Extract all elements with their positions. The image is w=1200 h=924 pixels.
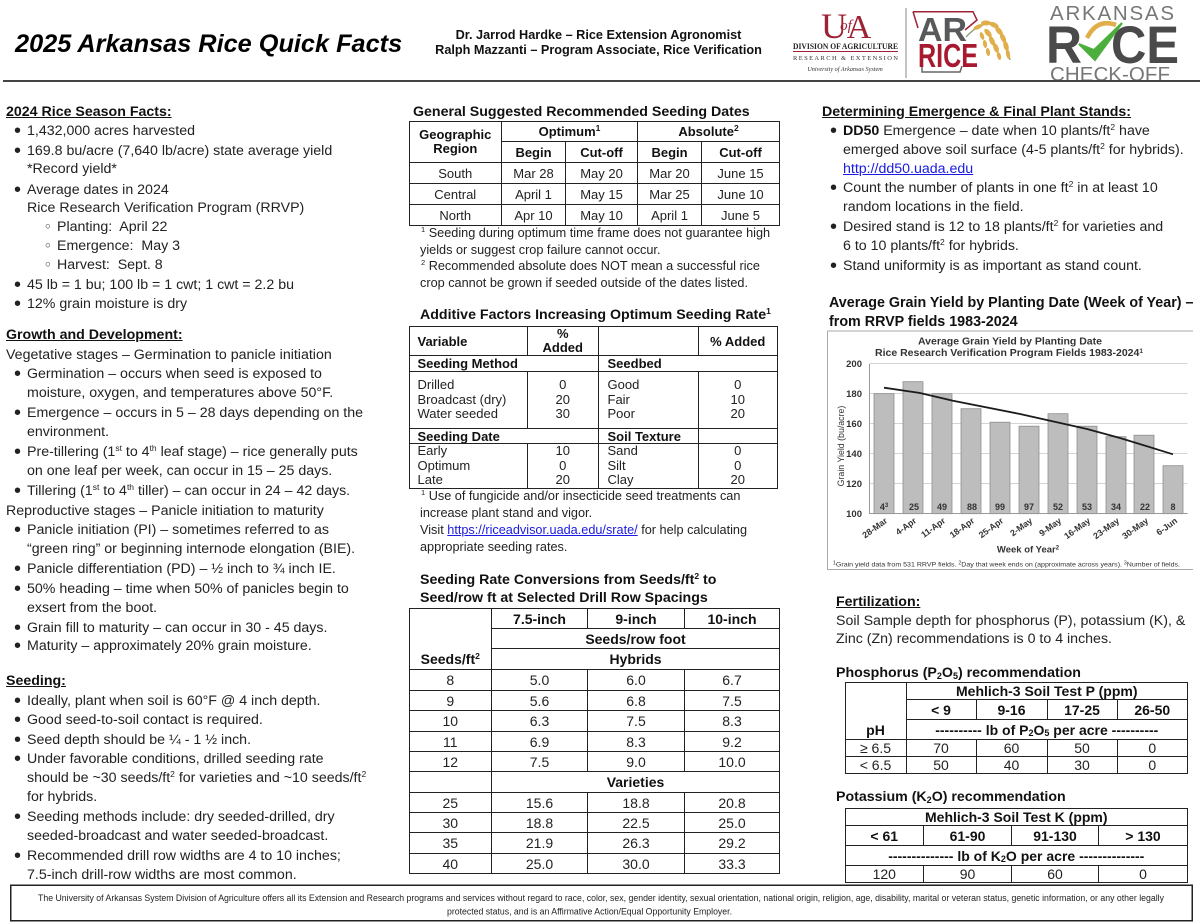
table: additive factors: 30 xyxy=(556,406,570,421)
bullet list: Stand uniformity is as important as stand count. xyxy=(843,258,1142,274)
heading: seeding rate conversions: Seed/row ft at Selected Drill Row Spacings xyxy=(420,590,708,606)
week labels: 4-Apr xyxy=(894,515,919,537)
table: seeding rate conversions: 6.9 xyxy=(530,734,549,750)
field counts: 53 xyxy=(1082,502,1092,512)
table: phosphorus: 9-16 xyxy=(997,702,1026,718)
table: seeding dates: Mar 20 xyxy=(649,166,690,180)
table: seeding rate conversions: Seeds/ft2 xyxy=(421,651,480,667)
footnotes: additive factors: Visit https://riceadvisor.uada.edu/srate/ for help calculating xyxy=(420,523,747,537)
fertilization note xyxy=(836,613,1186,647)
heading: potassium: Potassium (K2O) recommendation xyxy=(836,789,1066,805)
table: seeding rate conversions: Hybrids xyxy=(609,651,662,667)
field counts: 34 xyxy=(1111,502,1121,512)
chart footnote: Day that week ends on (approximate across years). xyxy=(961,562,1124,568)
chart footnote: 2 xyxy=(958,560,962,566)
footer disclaimer xyxy=(10,884,1193,922)
table: seeding rate conversions: 25.0 xyxy=(718,814,746,830)
table: potassium xyxy=(845,808,1188,883)
table: phosphorus: ≥ 6.5 xyxy=(860,740,891,756)
authors: Ralph Mazzanti – Program Associate, Rice Verification xyxy=(435,43,762,57)
header rule xyxy=(3,80,1200,82)
bullet list: Good seed-to-soil contact is required. xyxy=(27,712,263,728)
table: additive factors: Seeding Date xyxy=(418,428,500,444)
table: seeding rate conversions: 7.5-inch xyxy=(513,610,566,626)
table: seeding dates: May 15 xyxy=(580,186,623,202)
stage list: Panicle differentiation (PD) – ½ inch to ¾ inch IE. xyxy=(27,561,336,577)
table: seeding rate conversions: 33.3 xyxy=(718,856,746,872)
table: seeding rate conversions: 6.8 xyxy=(626,692,646,708)
chart footnote: Number of fields. xyxy=(1127,562,1180,568)
footnotes: additive factors: 1 Use of fungicide and/or insecticide seed treatments can xyxy=(421,488,740,503)
panel: growth and development xyxy=(6,327,363,654)
chart footnote: 3 xyxy=(1124,560,1127,566)
logo: University of Arkansas Division of Agriculture: A xyxy=(847,9,872,46)
table: seeding rate conversions: 9.2 xyxy=(722,734,742,750)
table: additive factors: Seedbed xyxy=(608,356,662,371)
table: seeding rate conversions: 9-inch xyxy=(615,610,657,626)
field counts: 8 xyxy=(1170,502,1176,512)
week labels: 18-Apr xyxy=(948,515,977,540)
fertilization note: Soil Sample depth for phosphorus (P), potassium (K), & xyxy=(836,613,1185,629)
bullet list: 12% grain moisture is dry xyxy=(27,296,187,312)
table: potassium: 120 xyxy=(873,866,896,882)
table: seeding rate conversions: Seeds/row foot xyxy=(585,630,686,646)
table: phosphorus: < 9 xyxy=(931,702,951,718)
stage list: Emergence – occurs in 5 – 28 days depending on the xyxy=(27,405,363,421)
table: additive factors: Seeding Method xyxy=(418,356,518,371)
table: potassium: 0 xyxy=(1139,866,1147,882)
table: seeding rate conversions xyxy=(409,608,780,874)
bullet list: emerged above soil surface (4-5 plants/ft2 for hybrids). xyxy=(843,141,1184,158)
table: additive factors: Soil Texture xyxy=(608,428,681,444)
bullet list: 169.8 bu/acre (7,640 lb/acre) state average yield xyxy=(27,143,332,159)
table: additive factors: Silt xyxy=(608,458,626,473)
heading: seeding dates: General Suggested Recommended Seeding Dates xyxy=(413,104,750,120)
heading: grain yield chart: Average Grain Yield by Planting Date (Week of Year) – xyxy=(829,295,1193,311)
footnotes: additive factors: increase plant stand and vigor. xyxy=(420,506,592,520)
table: additive factors: 0 xyxy=(559,377,566,392)
table: potassium: 91-130 xyxy=(1033,828,1077,844)
table: seeding dates: June 15 xyxy=(717,166,764,180)
table: seeding dates: Optimum1 xyxy=(539,123,600,139)
logo: University of Arkansas Division of Agriculture: U xyxy=(821,6,847,46)
bullet list: *Record yield* xyxy=(27,161,117,177)
title: 2025 Arkansas Rice Quick Facts xyxy=(15,30,402,58)
table: seeding dates: June 10 xyxy=(717,186,764,202)
stage list: Tillering (1st to 4th tiller) – can occur in 24 – 42 days. xyxy=(27,482,350,499)
heading: grain yield chart xyxy=(829,295,1193,330)
chart title: Average Grain Yield by Planting Date xyxy=(918,336,1102,348)
table: additive factors: 0 xyxy=(734,377,741,392)
table: additive factors: Fair xyxy=(608,392,630,407)
table: additive factors: Late xyxy=(418,472,443,487)
stage list: Pre-tillering (1st to 4th leaf stage) – rice generally puts xyxy=(27,443,358,460)
table: seeding rate conversions: 10.0 xyxy=(718,754,746,770)
table: additive factors: 0 xyxy=(734,458,741,473)
table: potassium: < 61 xyxy=(870,828,898,844)
panel: determining emergence and final plant stands xyxy=(822,104,1184,274)
table: seeding dates: Central xyxy=(434,186,476,202)
bullet list: Desired stand is 12 to 18 plants/ft2 for varieties and xyxy=(843,218,1163,235)
x axis title: Week of Year xyxy=(997,544,1056,556)
table: seeding rate conversions: 11 xyxy=(443,734,458,750)
heading: 2024 Rice Season Facts: xyxy=(6,104,172,120)
table: seeding rate conversions: 15.6 xyxy=(526,794,553,810)
table: phosphorus: 30 xyxy=(1074,757,1090,773)
field counts: 49 xyxy=(937,502,947,512)
y axis labels: 120 xyxy=(846,479,862,490)
stage list: Grain fill to maturity – can occur in 30 - 45 days. xyxy=(27,620,327,636)
bullet list: should be ~30 seeds/ft2 for varieties and ~10 seeds/ft2 xyxy=(27,769,366,786)
field counts: 3 xyxy=(885,503,889,509)
logo: Arkansas Rice Check-Off: ARKANSAS xyxy=(1050,2,1174,25)
week labels: 30-May xyxy=(1120,515,1150,541)
logo: Arkansas Rice Check-Off: R xyxy=(1046,16,1082,75)
stage list xyxy=(6,347,363,654)
table: seeding rate conversions: 9 xyxy=(446,692,454,708)
stage list: Reproductive stages – Panicle initiation to maturity xyxy=(6,503,324,519)
table: additive factors: 20 xyxy=(556,472,570,487)
table: seeding dates: Region xyxy=(433,140,477,156)
table: additive factors: Broadcast (dry) xyxy=(418,392,506,407)
table: additive factors: % Added xyxy=(710,334,765,348)
table: phosphorus: Mehlich-3 Soil Test P (ppm) xyxy=(956,683,1138,699)
field counts: 99 xyxy=(995,502,1005,512)
table: seeding rate conversions: 5.6 xyxy=(530,692,549,708)
table: seeding dates: Mar 25 xyxy=(649,186,690,202)
heading: Growth and Development: xyxy=(6,327,183,343)
table: seeding rate conversions: 22.5 xyxy=(622,814,650,830)
week labels: 9-May xyxy=(1037,515,1063,538)
table: seeding rate conversions: 35 xyxy=(442,835,458,851)
table: additive factors: Clay xyxy=(608,472,634,487)
table: seeding rate conversions: 30.0 xyxy=(622,856,650,872)
table: seeding rate conversions: 6.3 xyxy=(530,713,549,729)
table: phosphorus: pH xyxy=(866,722,885,738)
table: phosphorus: 17-25 xyxy=(1064,702,1100,718)
table: phosphorus: ---------- lb of P2O5 per acre ---------- xyxy=(935,722,1158,738)
table: seeding dates: April 1 xyxy=(651,208,688,222)
table: additive factors: 10 xyxy=(731,392,745,407)
x axis title: 2 xyxy=(1056,546,1060,552)
footnotes: seeding dates: yields or suggest crop failure cannot occur. xyxy=(420,243,660,257)
table: additive factors: 0 xyxy=(559,458,566,473)
table: phosphorus: 0 xyxy=(1148,740,1156,756)
y axis title: Grain Yield (bu/acre) xyxy=(836,406,846,486)
authors: Dr. Jarrod Hardke – Rice Extension Agronomist xyxy=(456,28,741,42)
bullet list: Count the number of plants in one ft2 in at least 10 xyxy=(843,179,1158,196)
footnotes: additive factors xyxy=(420,488,747,554)
logo: AR Rice: AR xyxy=(918,11,967,48)
bullet list: seeded-broadcast and water seeded-broadcast. xyxy=(27,828,328,844)
chart footnote: Grain yield data from 531 RRVP fields. xyxy=(836,562,958,568)
heading: grain yield chart: from RRVP fields 1983-2024 xyxy=(829,314,1018,330)
footer disclaimer: protected status, and is an Affirmative Action/Equal Opportunity Employer. xyxy=(447,906,732,918)
table: seeding rate conversions: 25 xyxy=(442,794,458,810)
table: seeding rate conversions: 18.8 xyxy=(526,814,553,830)
field counts: 22 xyxy=(1140,502,1150,512)
stage list: “green ring” or beginning internode elongation (BIE). xyxy=(27,541,355,557)
table: seeding dates: North xyxy=(439,208,471,222)
logo: Arkansas Rice Check-Off xyxy=(1046,2,1179,86)
footnotes: seeding dates: 1 Seeding during optimum time frame does not guarantee high xyxy=(421,225,770,240)
heading: Seeding: xyxy=(6,673,66,689)
chart title: 1 xyxy=(1139,348,1143,355)
table: additive factors: Optimum xyxy=(418,458,470,473)
table: phosphorus: 50 xyxy=(1074,740,1090,756)
y axis labels: 100 xyxy=(846,509,862,520)
chart title xyxy=(875,336,1143,359)
table: seeding dates: Mar 28 xyxy=(513,166,554,180)
footnotes: seeding dates: crop cannot be grown if seeded outside of the dates listed. xyxy=(420,276,748,290)
week labels: 23-May xyxy=(1091,515,1121,541)
table: seeding dates: South xyxy=(438,166,472,180)
table: seeding rate conversions: 8.3 xyxy=(722,713,742,729)
table: phosphorus: 60 xyxy=(1004,740,1019,756)
logo: University of Arkansas Division of Agriculture: RESEARCH & EXTENSION xyxy=(793,55,898,62)
table: seeding dates: Begin xyxy=(651,144,688,160)
field counts: 52 xyxy=(1053,502,1063,512)
stage list: on one leaf per week, can occur in 15 – 25 days. xyxy=(27,463,332,479)
footnotes: seeding dates xyxy=(420,225,770,290)
chart footnote: 1 xyxy=(833,560,836,566)
week labels: 16-May xyxy=(1062,515,1092,541)
y axis labels: 140 xyxy=(846,449,862,460)
heading: seeding rate conversions: Seeding Rate Conversions from Seeds/ft2 to xyxy=(420,570,716,588)
table: seeding dates xyxy=(409,121,780,226)
bullet list: Average dates in 2024 xyxy=(27,182,169,198)
stage list: 50% heading – time when 50% of panicles begin to xyxy=(27,581,349,597)
table: seeding rate conversions: 40 xyxy=(442,856,458,872)
footnotes: seeding dates: 2 Recommended absolute does NOT mean a successful rice xyxy=(421,258,760,273)
field counts: 4 xyxy=(880,502,885,512)
footnotes: additive factors: appropriate seeding rates. xyxy=(420,540,567,554)
week labels: 2-May xyxy=(1008,515,1034,538)
table: seeding rate conversions: 8.3 xyxy=(626,734,646,750)
table: additive factors: Drilled xyxy=(418,377,454,392)
table: seeding rate conversions: 7.5 xyxy=(722,692,742,708)
bar chart: grain yield by planting date xyxy=(827,330,1193,570)
table: seeding rate conversions: 21.9 xyxy=(526,835,553,851)
bullet list xyxy=(830,122,1184,274)
bullet list: Seeding methods include: dry seeded-drilled, dry xyxy=(27,809,335,825)
table: additive factors: Added xyxy=(543,340,583,355)
authors xyxy=(435,28,762,57)
table: seeding dates: Cut-off xyxy=(719,144,762,160)
logo: AR Rice xyxy=(913,11,1011,74)
table: phosphorus: 40 xyxy=(1004,757,1019,773)
week labels: 11-Apr xyxy=(919,515,948,540)
bars xyxy=(874,382,1183,514)
chart title: Rice Research Verification Program Fields 1983-2024 xyxy=(875,347,1139,359)
fertilization note: Zinc (Zn) recommendations is 0 to 4 inches. xyxy=(836,631,1112,647)
table: additive factors: Poor xyxy=(608,406,635,421)
y axis labels xyxy=(846,359,862,520)
table: additive factors: Good xyxy=(608,377,639,392)
table: seeding rate conversions: 10 xyxy=(442,713,458,729)
table: seeding rate conversions: 7.5 xyxy=(626,713,646,729)
heading: phosphorus: Phosphorus (P2O5) recommendation xyxy=(836,665,1081,681)
bullet list: Ideally, plant when soil is 60°F @ 4 inch depth. xyxy=(27,693,320,709)
week labels xyxy=(860,515,1179,541)
stage list: Germination – occurs when seed is exposed to xyxy=(27,366,322,382)
bullet list: Rice Research Verification Program (RRVP) xyxy=(27,200,304,216)
heading: seeding rate conversions xyxy=(420,570,716,606)
panel: 2024 rice season facts xyxy=(6,104,332,312)
table: seeding dates: April 1 xyxy=(515,186,552,202)
y axis labels: 160 xyxy=(846,419,862,430)
table: seeding rate conversions: 6.0 xyxy=(626,672,646,688)
table: phosphorus: 50 xyxy=(933,757,949,773)
stage list: Panicle initiation (PI) – sometimes referred to as xyxy=(27,522,329,538)
table: phosphorus xyxy=(845,682,1188,774)
bullet list: 1,432,000 acres harvested xyxy=(27,123,195,139)
logo: University of Arkansas Division of Agriculture: University of Arkansas System xyxy=(807,66,883,73)
panel: fertilization xyxy=(836,594,1186,647)
y axis labels: 200 xyxy=(846,359,862,370)
table: seeding rate conversions: 30 xyxy=(442,814,458,830)
table: seeding rate conversions: 5.0 xyxy=(530,672,549,688)
table: additive factors: Water seeded xyxy=(418,406,498,421)
bullet list xyxy=(14,693,366,883)
bullet list: for hybrids. xyxy=(27,789,97,805)
table: potassium: 90 xyxy=(960,866,975,882)
bullet list xyxy=(14,123,332,312)
table: additive factors: 20 xyxy=(731,406,745,421)
header logos xyxy=(793,2,1179,80)
stage list: Vegetative stages – Germination to panicle initiation xyxy=(6,347,332,363)
y axis labels: 180 xyxy=(846,389,862,400)
bullet list: http://dd50.uada.edu xyxy=(843,161,973,177)
bullet list: Harvest: Sept. 8 xyxy=(57,257,163,273)
table: potassium: > 130 xyxy=(1125,828,1161,844)
table: potassium: Mehlich-3 Soil Test K (ppm) xyxy=(925,809,1108,825)
stage list: moisture, oxygen, and temperatures above 50°F. xyxy=(27,385,333,401)
table: additive factors: Variable xyxy=(418,334,467,348)
table: seeding dates: Cut-off xyxy=(580,144,623,160)
table: seeding rate conversions: 12 xyxy=(442,754,458,770)
table: additive factors xyxy=(409,326,778,489)
table: seeding dates: May 20 xyxy=(580,166,623,180)
bullet list: random locations in the field. xyxy=(843,199,1024,215)
heading: Determining Emergence & Final Plant Stands: xyxy=(822,104,1131,120)
logo: University of Arkansas Division of Agriculture xyxy=(793,6,898,73)
table: phosphorus: < 6.5 xyxy=(860,757,891,773)
table: seeding rate conversions: 25.0 xyxy=(526,856,553,872)
table: seeding dates: Absolute2 xyxy=(678,123,739,139)
table: seeding rate conversions: 8 xyxy=(446,672,454,688)
table: seeding rate conversions: 29.2 xyxy=(718,835,746,851)
heading: Fertilization: xyxy=(836,594,920,610)
table: seeding rate conversions: Varieties xyxy=(607,774,664,790)
field counts xyxy=(880,502,1176,512)
bullet list: 45 lb = 1 bu; 100 lb = 1 cwt; 1 cwt = 2.2 bu xyxy=(27,277,294,293)
table: seeding rate conversions: 10-inch xyxy=(707,610,756,626)
table: seeding rate conversions: 9.0 xyxy=(626,754,646,770)
logo: Arkansas Rice Check-Off: CE xyxy=(1111,16,1179,75)
bullet list: 7.5-inch drill-row widths are most common. xyxy=(27,867,297,883)
table: seeding dates: June 5 xyxy=(721,208,760,222)
logo: University of Arkansas Division of Agriculture: of xyxy=(840,18,854,34)
table: potassium: 61-90 xyxy=(950,828,985,844)
table: phosphorus: 0 xyxy=(1148,757,1156,773)
bullet list: Planting: April 22 xyxy=(57,219,167,235)
bullet list: DD50 Emergence – date when 10 plants/ft2 have xyxy=(843,122,1150,139)
logo: AR Rice: RICE xyxy=(918,37,978,74)
stage list: Maturity – approximately 20% grain moisture. xyxy=(27,638,312,654)
stage list: environment. xyxy=(27,424,109,440)
table: seeding rate conversions: 6.7 xyxy=(722,672,742,688)
table: seeding dates: May 10 xyxy=(580,208,623,222)
heading: additive factors: Additive Factors Increasing Optimum Seeding Rate1 xyxy=(420,306,771,323)
week labels: 28-Mar xyxy=(860,515,890,540)
bullet list: Seed depth should be ¼ - 1 ½ inch. xyxy=(27,732,251,748)
week labels: 6-Jun xyxy=(1154,516,1179,537)
bullet list: 6 to 10 plants/ft2 for hybrids. xyxy=(843,237,1019,254)
table: seeding dates: Geographic xyxy=(419,126,491,142)
week labels: 25-Apr xyxy=(977,515,1006,540)
table: seeding rate conversions: 20.8 xyxy=(718,794,746,810)
table: additive factors: 20 xyxy=(556,392,570,407)
table: phosphorus: 26-50 xyxy=(1134,702,1170,718)
table: seeding dates: Begin xyxy=(515,144,552,160)
table: seeding rate conversions: 7.5 xyxy=(530,754,549,770)
bullet list: Under favorable conditions, drilled seeding rate xyxy=(27,751,324,767)
table: potassium: -------------- lb of K2O per acre -------------- xyxy=(888,848,1144,864)
field counts: 88 xyxy=(967,502,977,512)
logo: University of Arkansas Division of Agriculture: DIVISION OF AGRICULTURE xyxy=(793,42,898,51)
table: additive factors: 20 xyxy=(731,472,745,487)
stage list: exsert from the boot. xyxy=(27,600,157,616)
bullet list: Recommended drill row widths are 4 to 10 inches; xyxy=(27,848,341,864)
table: seeding rate conversions: 26.3 xyxy=(622,835,650,851)
table: seeding rate conversions: 18.8 xyxy=(622,794,650,810)
field counts: 97 xyxy=(1024,502,1034,512)
table: potassium: 60 xyxy=(1047,866,1063,882)
table: phosphorus: 70 xyxy=(933,740,949,756)
table: seeding dates: Apr 10 xyxy=(514,208,553,222)
bullet list: Emergence: May 3 xyxy=(57,238,180,254)
trend line xyxy=(884,388,1173,454)
field counts: 25 xyxy=(909,502,919,512)
panel: seeding xyxy=(6,673,366,883)
